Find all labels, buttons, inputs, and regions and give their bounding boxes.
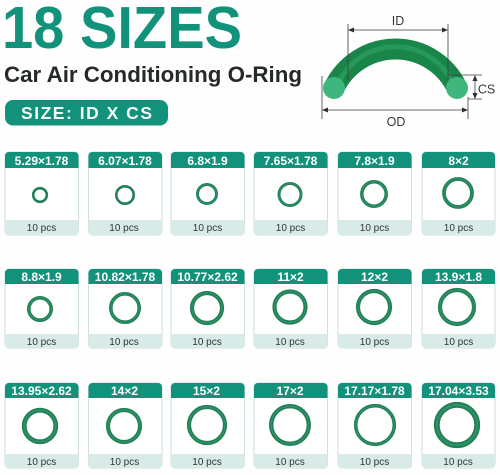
card: 6.07×1.78 bbox=[88, 152, 162, 235]
card: 8×2 bbox=[422, 152, 495, 235]
card: 15×2: 10 pcs bbox=[192, 457, 222, 468]
card: 13.9×1.8 bbox=[422, 269, 495, 348]
card: 13.9×1.8: 10 pcs bbox=[444, 337, 473, 348]
card: 15×2 bbox=[171, 383, 244, 468]
dimension: CS: CS bbox=[478, 82, 495, 96]
diagram: o-ring dimensions bbox=[322, 14, 495, 129]
card: 14×2: 14×2 bbox=[111, 384, 138, 398]
card: 12×2 bbox=[338, 269, 412, 348]
card: 17×2: 10 pcs bbox=[275, 457, 305, 468]
card: 5.29×1.78: 10 pcs bbox=[27, 223, 56, 234]
card: 8×2: 10 pcs bbox=[444, 223, 473, 234]
card: 17×2: 17×2 bbox=[276, 384, 304, 398]
card: 14×2: 10 pcs bbox=[110, 457, 139, 468]
card: 14×2 bbox=[88, 383, 162, 468]
card: 13.95×2.62: 10 pcs bbox=[27, 457, 56, 468]
card: 6.8×1.9: 10 pcs bbox=[193, 223, 222, 234]
card: 17.17×1.78: 10 pcs bbox=[360, 457, 389, 468]
card: 10.82×1.78: 10 pcs bbox=[109, 337, 139, 348]
card: 6.07×1.78: 6.07×1.78 bbox=[98, 154, 152, 168]
card: 6.07×1.78: 10 pcs bbox=[109, 223, 139, 234]
card: 17.17×1.78 bbox=[338, 383, 412, 468]
card: 7.8×1.9: 10 pcs bbox=[360, 223, 389, 234]
card: 17.04×3.53 bbox=[422, 383, 495, 468]
card: 13.95×2.62: 13.95×2.62 bbox=[11, 384, 72, 398]
card: 10.82×1.78 bbox=[88, 269, 162, 348]
card: 7.8×1.9 bbox=[338, 152, 412, 235]
card: 12×2: 12×2 bbox=[361, 270, 388, 284]
card: 10.77×2.62: 10 pcs bbox=[192, 337, 222, 348]
card: 17.04×3.53: 10 pcs bbox=[443, 457, 473, 468]
card: 12×2: 10 pcs bbox=[360, 337, 389, 348]
dimension: ID: ID bbox=[392, 14, 404, 28]
card: 13.9×1.8: 13.9×1.8 bbox=[435, 270, 482, 284]
card: 15×2: 15×2 bbox=[193, 384, 220, 398]
card: 11×2: 10 pcs bbox=[275, 337, 305, 348]
card: 5.29×1.78: 5.29×1.78 bbox=[15, 154, 69, 168]
dimension: ID bbox=[348, 14, 448, 80]
card: 13.95×2.62 bbox=[5, 383, 78, 468]
card: 8.8×1.9: 10 pcs bbox=[27, 337, 56, 348]
dimension: OD bbox=[322, 76, 468, 129]
card: 8×2: 8×2 bbox=[448, 154, 469, 168]
card: 17×2 bbox=[254, 383, 328, 468]
dimension: OD: OD bbox=[387, 115, 405, 129]
icon: half o-ring arc bbox=[323, 47, 468, 99]
card: 8.8×1.9: 8.8×1.9 bbox=[21, 270, 62, 284]
card: 6.8×1.9: 6.8×1.9 bbox=[187, 154, 228, 168]
card: 5.29×1.78 bbox=[5, 152, 78, 235]
card: 7.65×1.78 bbox=[254, 152, 328, 235]
card: 11×2: 11×2 bbox=[277, 270, 304, 284]
card: 10.77×2.62 bbox=[171, 269, 244, 348]
card: 6.8×1.9 bbox=[171, 152, 244, 235]
card: 7.8×1.9: 7.8×1.9 bbox=[354, 154, 395, 168]
card: 10.77×2.62: 10.77×2.62 bbox=[177, 270, 238, 284]
size format badge bbox=[5, 100, 168, 126]
card: 7.65×1.78: 10 pcs bbox=[276, 223, 305, 234]
card: 11×2 bbox=[254, 269, 328, 348]
card: 17.17×1.78: 17.17×1.78 bbox=[344, 384, 405, 398]
subtitle: Car Air Conditioning O-Ring bbox=[4, 62, 302, 87]
card: 17.04×3.53: 17.04×3.53 bbox=[428, 384, 489, 398]
card: 8.8×1.9 bbox=[5, 269, 78, 348]
card: 7.65×1.78: 7.65×1.78 bbox=[264, 154, 318, 168]
dimension: CS bbox=[448, 75, 495, 99]
size format badge: SIZE: ID X CS bbox=[21, 103, 152, 123]
card: 10.82×1.78: 10.82×1.78 bbox=[95, 270, 156, 284]
